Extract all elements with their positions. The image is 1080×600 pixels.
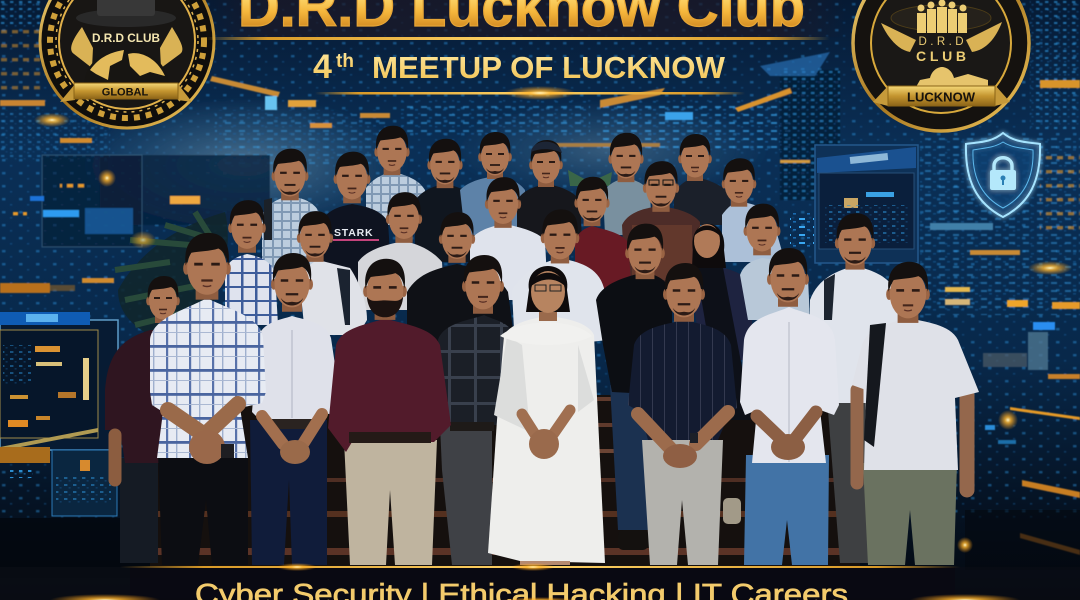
person in dark shirt, jeans (596, 224, 672, 550)
woman in navy plaid top (690, 224, 752, 524)
wings (71, 27, 182, 68)
back row person 7 (722, 158, 785, 262)
ribbon: GLOBAL (102, 86, 148, 98)
back row person 6 (674, 134, 730, 225)
person with backpack, white shirt, grey trousers (810, 213, 905, 563)
subtitle: 4 (313, 48, 332, 86)
left data screen panel (0, 312, 118, 516)
front: man in navy shirt, grey trousers (628, 263, 737, 565)
ribbon (873, 85, 1010, 106)
back row person 5 (603, 133, 652, 235)
back row person 4 with cap (517, 140, 582, 240)
hat (76, 0, 176, 27)
globe (84, 50, 169, 84)
third row person in white shirt right (512, 209, 608, 350)
front: man in maroon shirt, khaki trousers (328, 259, 451, 565)
staircase (145, 395, 860, 567)
front: woman in white dress and dupatta (488, 266, 605, 565)
front: man in white shirt, jeans (740, 248, 839, 565)
person in maroon patterned shirt (622, 161, 700, 285)
top shade behind title (205, 0, 845, 37)
plant behind the group (115, 170, 612, 335)
badge: D.R.D Club Global: D.R.D CLUB (92, 33, 160, 45)
subtitle: MEETUP OF LUCKNOW (372, 50, 726, 85)
second row person left (262, 149, 322, 270)
icon: cyber security shield with padlock (966, 133, 1040, 217)
ribbon: LUCKNOW (907, 90, 976, 104)
person at far left in maroon (105, 276, 180, 563)
person in STARK t-shirt (320, 152, 392, 285)
front: man in checked shirt (150, 233, 266, 565)
title underline (205, 37, 830, 40)
person in red t-shirt (574, 177, 632, 295)
badge: D.R.D Club Global (40, 0, 214, 128)
badge: D.R.D Club Lucknow: CLUB (916, 48, 966, 64)
skyline (916, 67, 988, 87)
wings (881, 22, 1002, 52)
third row person in white with backpack (297, 211, 367, 335)
group icon (917, 0, 967, 33)
badge: D.R.D Club Lucknow (853, 0, 1029, 131)
front: man in dark plaid shirt, grey trousers (438, 255, 512, 565)
back row person 2 (415, 139, 484, 262)
front: man in white shirt, navy trousers (250, 253, 341, 565)
front: man in white polo, olive trousers (852, 262, 979, 565)
subtitle: th (336, 51, 354, 72)
back row person 3 (460, 132, 525, 235)
ribbon (60, 83, 192, 102)
person in light blue shirt (740, 204, 810, 320)
person in white shirt (470, 177, 548, 300)
bottom band (0, 563, 1080, 600)
person in patterned white shirt (358, 192, 445, 310)
person in STARK t-shirt: STARK (334, 227, 373, 239)
back row person 1 (366, 126, 428, 225)
third row person in black shirt (407, 212, 515, 345)
glow flares (34, 113, 1072, 600)
badge: D.R.D Club Lucknow: D.R.D (918, 36, 964, 48)
third row person in blue plaid (225, 200, 278, 325)
right data screen panel (790, 145, 918, 263)
group photo of meetup attendees (105, 126, 979, 565)
subtitle underline with flare (315, 86, 745, 100)
